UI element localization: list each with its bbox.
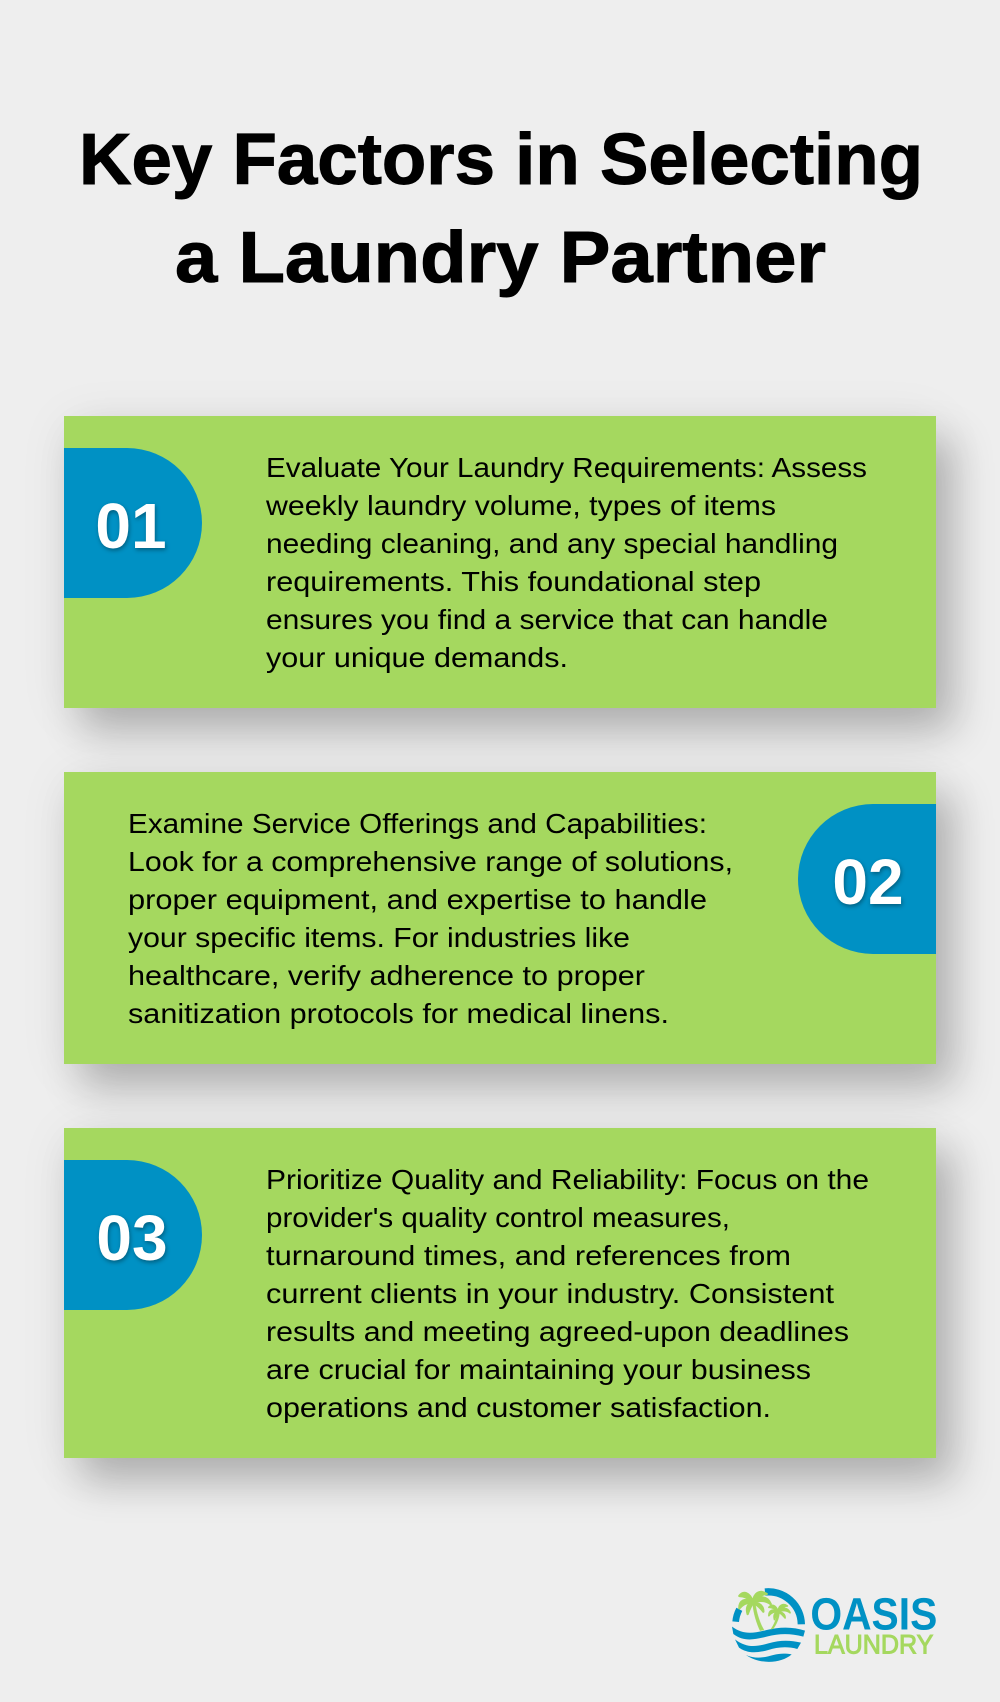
wordmark: OASIS: OASIS <box>810 1588 937 1639</box>
icon: palm trees <box>739 1592 790 1631</box>
text: prioritize quality and reliability: provider's quality control measures, <box>266 1202 730 1233</box>
title: a Laundry Partner <box>175 218 826 298</box>
title <box>79 120 923 298</box>
icon: sun ring <box>736 1592 801 1624</box>
badge: 02 <box>798 804 936 954</box>
text: evaluate your laundry requirements: requirements. This foundational step <box>266 566 761 597</box>
text: examine service offerings: your specific items. For industries like <box>128 922 630 953</box>
badge: 03: 03 <box>96 1202 168 1274</box>
text: examine service offerings: Look for a comprehensive range of solutions, <box>128 846 733 877</box>
text: examine service offerings: proper equipment, and expertise to handle <box>128 884 707 915</box>
text: prioritize quality and reliability: results and meeting agreed-upon deadlines <box>266 1316 849 1347</box>
text: prioritize quality and reliability: turnaround times, and references from <box>266 1240 791 1271</box>
text: examine service offerings: sanitization protocols for medical linens. <box>128 998 669 1029</box>
badge: 01 <box>64 448 202 598</box>
logo: Oasis Laundry <box>732 1588 937 1662</box>
panel: step 02 <box>64 772 936 1064</box>
text: examine service offerings <box>128 808 733 1029</box>
text: evaluate your laundry requirements: your unique demands. <box>266 642 568 673</box>
panel: step 03 <box>64 1128 936 1458</box>
title: Key Factors in Selecting <box>79 120 923 200</box>
text: evaluate your laundry requirements: ensures you find a service that can handle <box>266 604 828 635</box>
wordmark: LAUNDRY: LAUNDRY <box>814 1629 934 1659</box>
badge: 03 <box>64 1160 202 1310</box>
text: examine service offerings: Examine Service Offerings and Capabilities: <box>128 808 707 839</box>
text: evaluate your laundry requirements: weekly laundry volume, types of items <box>265 490 776 521</box>
text: evaluate your laundry requirements: needing cleaning, and any special handling <box>266 528 838 559</box>
text: prioritize quality and reliability: Prioritize Quality and Reliability: Focus on the <box>266 1164 869 1195</box>
badge: 01: 01 <box>95 490 167 562</box>
icon: waves <box>732 1627 805 1662</box>
text: prioritize quality and reliability: are crucial for maintaining your business <box>266 1354 811 1385</box>
text: evaluate your laundry requirements <box>265 452 867 673</box>
text: prioritize quality and reliability <box>266 1164 869 1423</box>
panel: step 01 <box>64 416 936 708</box>
text: examine service offerings: healthcare, verify adherence to proper <box>128 960 645 991</box>
text: prioritize quality and reliability: current clients in your industry. Consistent <box>266 1278 834 1309</box>
text: prioritize quality and reliability: operations and customer satisfaction. <box>266 1392 771 1423</box>
text: evaluate your laundry requirements: Evaluate Your Laundry Requirements: Assess <box>266 452 867 483</box>
badge: 02: 02 <box>832 846 904 918</box>
